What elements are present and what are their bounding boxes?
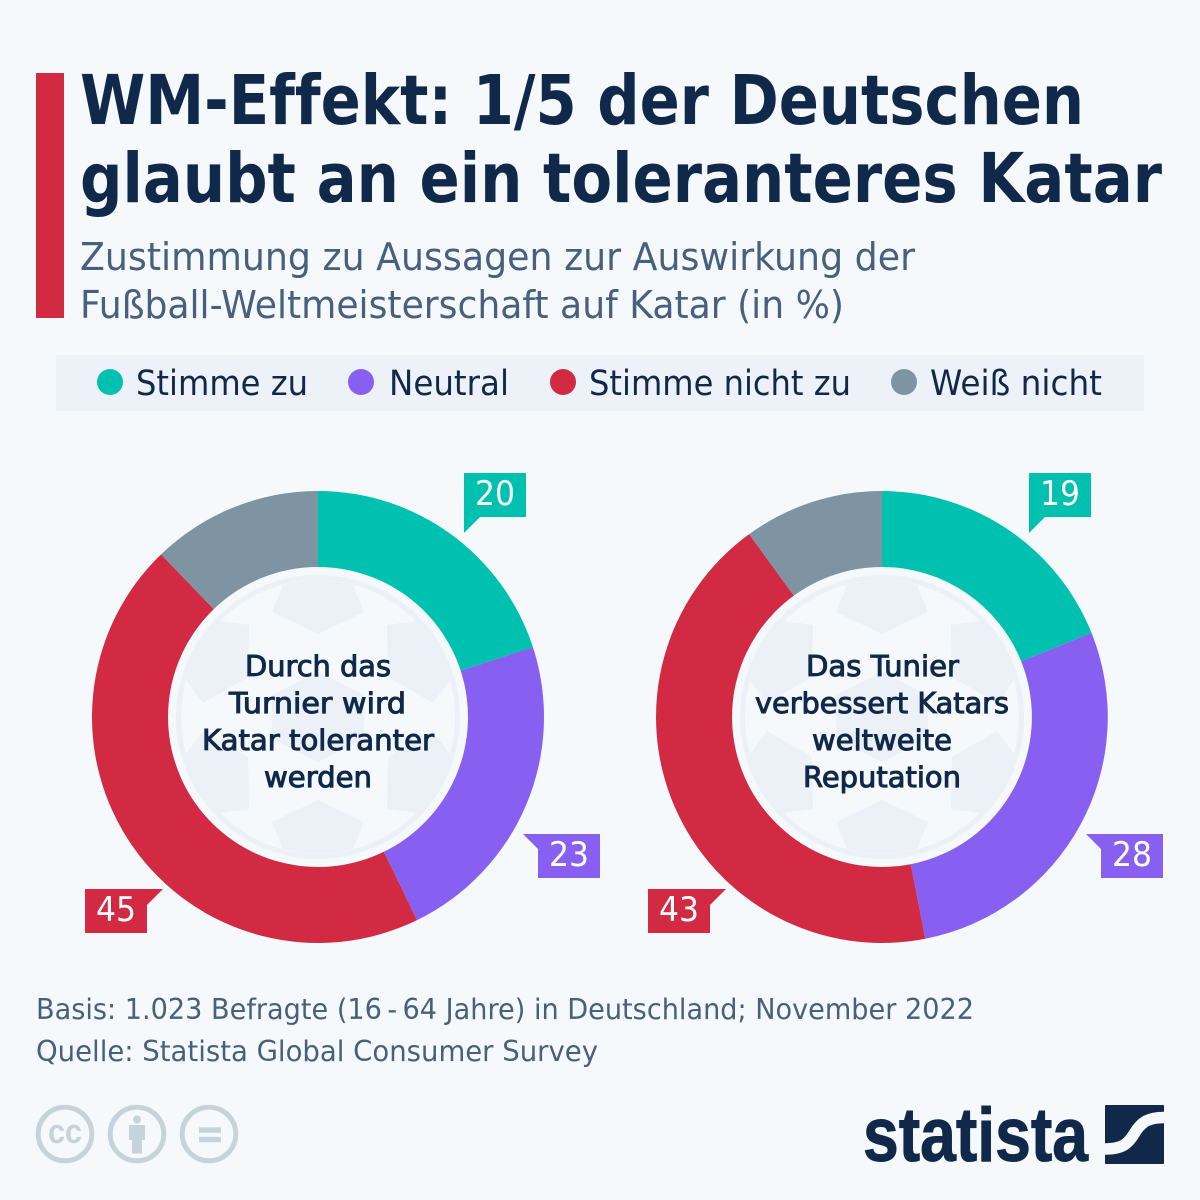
legend: Weiß nicht xyxy=(930,364,1102,404)
legend: Stimme zu xyxy=(136,364,308,404)
source note: Basis: 1.023 Befragte (16 - 64 Jahre) in Deutschland; November 2022 xyxy=(36,993,974,1026)
legend: Stimme nicht zu xyxy=(589,364,851,404)
segment: don't know xyxy=(161,491,318,609)
accent bar xyxy=(36,73,64,318)
license icon: cc xyxy=(38,1107,92,1161)
center label: Turnier wird xyxy=(228,687,406,720)
value tag: 20 xyxy=(464,473,526,533)
title xyxy=(80,61,1162,219)
subtitle: Zustimmung zu Aussagen zur Auswirkung der xyxy=(80,235,915,279)
center label: verbessert Katars xyxy=(755,687,1009,720)
segment: agree 19 xyxy=(882,491,1092,661)
value tag: 28 xyxy=(1086,834,1163,878)
segment: neutral 23 xyxy=(384,647,544,920)
soccer ball pattern xyxy=(178,578,458,856)
center label: Reputation xyxy=(803,761,961,794)
donut chart: reputation xyxy=(648,473,1163,943)
value tag: 28: 28 xyxy=(1112,835,1152,875)
center label: Durch das xyxy=(245,650,391,683)
statista wordmark: statista xyxy=(863,1093,1089,1178)
value tag: 20: 20 xyxy=(475,474,515,514)
legend xyxy=(56,355,1144,411)
center label: werden xyxy=(264,761,372,794)
source note: Quelle: Statista Global Consumer Survey xyxy=(36,1035,598,1068)
subtitle: Fußball-Weltmeisterschaft auf Katar (in %) xyxy=(80,283,844,327)
value tag: 19: 19 xyxy=(1040,474,1080,514)
license icon: cc: cc xyxy=(48,1113,82,1151)
center label: Das Tunier xyxy=(806,650,959,683)
segment: agree 20 xyxy=(318,491,533,671)
subtitle xyxy=(80,235,915,327)
value tag: 43: 43 xyxy=(659,890,699,930)
value tag: 45: 45 xyxy=(96,890,136,930)
segment: disagree 45 xyxy=(92,554,417,943)
value tag: 45 xyxy=(85,889,163,933)
legend: Neutral xyxy=(389,364,509,404)
value tag: 23: 23 xyxy=(549,835,589,875)
segment: disagree 43 xyxy=(656,534,925,943)
statista logo mark xyxy=(1105,1105,1164,1164)
value tag: 43 xyxy=(648,889,726,933)
value tag: 19 xyxy=(1029,473,1091,533)
soccer ball pattern xyxy=(742,578,1022,856)
segment: don't know xyxy=(749,491,882,596)
center label: Katar toleranter xyxy=(202,724,434,757)
license icon: no derivatives xyxy=(182,1107,236,1161)
center label: weltweite xyxy=(812,724,952,757)
license icon: attribution xyxy=(110,1107,164,1161)
center label xyxy=(755,650,1009,794)
source note xyxy=(36,993,974,1068)
center label xyxy=(202,650,434,794)
segment: neutral 28 xyxy=(911,633,1108,939)
donut chart: tolerance xyxy=(85,473,600,943)
value tag: 23 xyxy=(523,834,600,878)
